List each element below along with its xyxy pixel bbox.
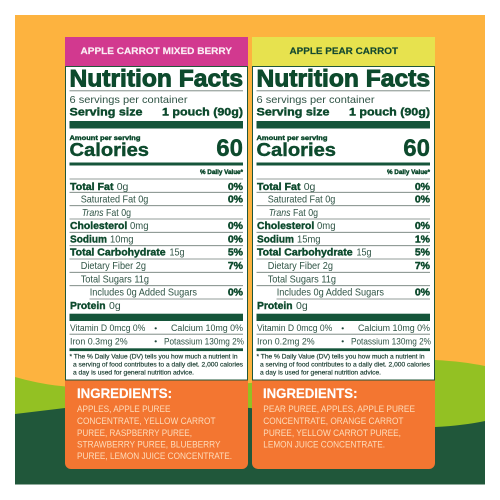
nutrition facts label: 60	[216, 135, 243, 162]
nutrient rows: Protein	[257, 300, 292, 312]
panel: Apple Carrot Mixed Berry	[65, 37, 248, 469]
vitamins and minerals	[256, 323, 431, 346]
nutrient rows: Cholesterol	[257, 220, 314, 232]
vitamins and minerals	[70, 323, 244, 346]
nutrition facts label: Amount per serving	[70, 135, 141, 142]
nutrient rows: 0%	[228, 233, 244, 245]
nutrient rows: 0g	[117, 181, 129, 193]
vitamins and minerals: Vitamin D 0mcg 0%	[70, 323, 145, 333]
vitamins and minerals: Vitamin D 0mcg 0%	[257, 323, 332, 333]
nutrient rows: Protein	[70, 300, 106, 312]
nutrition facts label: Amount per serving	[256, 135, 328, 142]
calories: Calories	[256, 140, 336, 160]
ingredients panel: STRAWBERRY PUREE, BLUEBERRY	[77, 440, 220, 450]
calories: Calories	[70, 140, 149, 160]
ingredients panel: PUREE, YELLOW CARROT PUREE,	[263, 428, 401, 438]
nutrient rows	[257, 181, 431, 312]
ingredients panel: INGREDIENTS:	[77, 385, 172, 401]
footnote: a serving of food contributes to a daily diet. 2,000 calories	[260, 362, 431, 369]
nutrient rows: 5%	[415, 247, 431, 259]
vitamins and minerals: Calcium 10mg 0%	[171, 323, 243, 333]
nutrient rows: 0g	[109, 300, 121, 312]
nutrition facts label: 6 servings per container	[70, 94, 188, 106]
flavor header: Apple Carrot Mixed Berry: APPLE CARROT MIXED BERRY	[80, 46, 233, 57]
footnote: a day is used for general nutrition advice.	[73, 370, 194, 377]
heading: Nutrition Facts: Nutrition Facts	[256, 66, 430, 92]
nutrient rows: Total Sugars 11g	[268, 273, 336, 285]
flavor header: Apple Pear Carrot: APPLE PEAR CARROT	[290, 46, 398, 57]
nutrient rows: Cholesterol	[70, 220, 127, 232]
nutrition facts label: 6 servings per container	[256, 94, 375, 106]
nutrient rows: Sodium	[70, 233, 107, 245]
nutrient rows: Total Fat	[257, 181, 301, 193]
ingredients panel: INGREDIENTS:	[263, 385, 358, 401]
footnote: a serving of food contributes to a daily diet. 2,000 calories	[73, 362, 244, 369]
nutrient rows: 0%	[415, 287, 431, 299]
nutrient rows: 0mg	[317, 220, 336, 232]
nutrient rows: Total Fat	[70, 181, 114, 193]
ingredients panel: PEAR PUREE, APPLES, APPLE PUREE	[263, 404, 415, 414]
nutrient rows: 0%	[415, 181, 431, 193]
ingredients panel: CONCENTRATE, ORANGE CARROT	[263, 416, 404, 426]
nutrient rows: Includes 0g Added Sugars	[277, 287, 384, 299]
footnote: a day is used for general nutrition advice.	[260, 370, 381, 377]
nutrient rows: 1%	[415, 233, 431, 245]
nutrient rows: 0%	[228, 194, 244, 206]
ingredients panel	[252, 378, 435, 469]
panel: Apple Pear Carrot	[252, 37, 435, 469]
nutrition facts label	[252, 66, 434, 380]
nutrient rows: Total Carbohydrate	[257, 247, 353, 259]
nutrition facts label: 1 pouch (90g)	[349, 106, 430, 118]
nutrient rows: Sodium	[257, 233, 294, 245]
nutrient rows: Saturated Fat 0g	[81, 194, 148, 206]
nutrition facts label: 60	[403, 135, 430, 162]
nutrient rows: Dietary Fiber 2g	[81, 260, 146, 272]
ingredients panel: APPLES, APPLE PUREE	[77, 404, 170, 414]
nutrition facts label: 1 pouch (90g)	[162, 106, 243, 118]
nutrient rows: 7%	[228, 260, 244, 272]
nutrient rows: 10mg	[110, 233, 134, 245]
ingredients panel	[65, 378, 248, 469]
vitamins and minerals: Iron 0.2mg 2%	[257, 336, 315, 346]
vitamins and minerals: Potassium 130mg 2%	[351, 336, 431, 346]
nutrient rows: Trans Fat 0g	[269, 207, 318, 219]
nutrient rows: 7%	[415, 260, 431, 272]
nutrient rows: 0mg	[130, 220, 149, 232]
nutrient rows: 15g	[170, 247, 185, 259]
nutrient rows: 0%	[415, 220, 431, 232]
ingredients panel: PUREE, LEMON JUICE CONCENTRATE.	[77, 451, 232, 461]
nutrient rows: 0%	[415, 194, 431, 206]
ingredients panel: PUREE, RASPBERRY PUREE,	[77, 428, 192, 438]
nutrition facts label	[66, 66, 248, 380]
ingredients panel: CONCENTRATE, YELLOW CARROT	[77, 416, 216, 426]
flavor header: Apple Carrot Mixed Berry	[65, 37, 248, 66]
nutrition facts label: % Daily Value*	[200, 169, 244, 176]
nutrient rows: 15mg	[297, 233, 321, 245]
flavor header: Apple Pear Carrot	[252, 37, 435, 66]
nutrient rows: Saturated Fat 0g	[268, 194, 335, 206]
nutrient rows	[70, 181, 244, 312]
vitamins and minerals: Calcium 10mg 0%	[358, 323, 430, 333]
footnote	[256, 354, 431, 377]
nutrient rows: 0%	[228, 181, 244, 193]
nutrient rows: 5%	[228, 247, 244, 259]
nutrient rows: 0g	[296, 300, 308, 312]
nutrient rows: Dietary Fiber 2g	[268, 260, 333, 272]
vitamins and minerals: Iron 0.3mg 2%	[70, 336, 128, 346]
nutrient rows: Trans Fat 0g	[82, 207, 131, 219]
nutrition facts label: Serving size	[256, 106, 330, 118]
nutrient rows: 0%	[228, 220, 244, 232]
footnote: * The % Daily Value (DV) tells you how much a nutrient in	[70, 354, 238, 361]
footnote: * The % Daily Value (DV) tells you how much a nutrient in	[256, 354, 425, 361]
nutrition facts label: % Daily Value*	[387, 169, 431, 176]
nutrient rows: 0g	[304, 181, 316, 193]
nutrient rows: Total Carbohydrate	[70, 247, 166, 259]
nutrition facts label: Serving size	[70, 106, 142, 118]
footnote	[70, 354, 244, 377]
heading: Nutrition Facts: Nutrition Facts	[70, 66, 243, 92]
ingredients panel: LEMON JUICE CONCENTRATE.	[263, 440, 385, 450]
nutrient rows: 15g	[356, 247, 372, 259]
nutrient rows: Total Sugars 11g	[81, 273, 149, 285]
nutrient rows: 0%	[228, 287, 244, 299]
vitamins and minerals: Potassium 130mg 2%	[164, 336, 244, 346]
nutrient rows: Includes 0g Added Sugars	[90, 287, 197, 299]
